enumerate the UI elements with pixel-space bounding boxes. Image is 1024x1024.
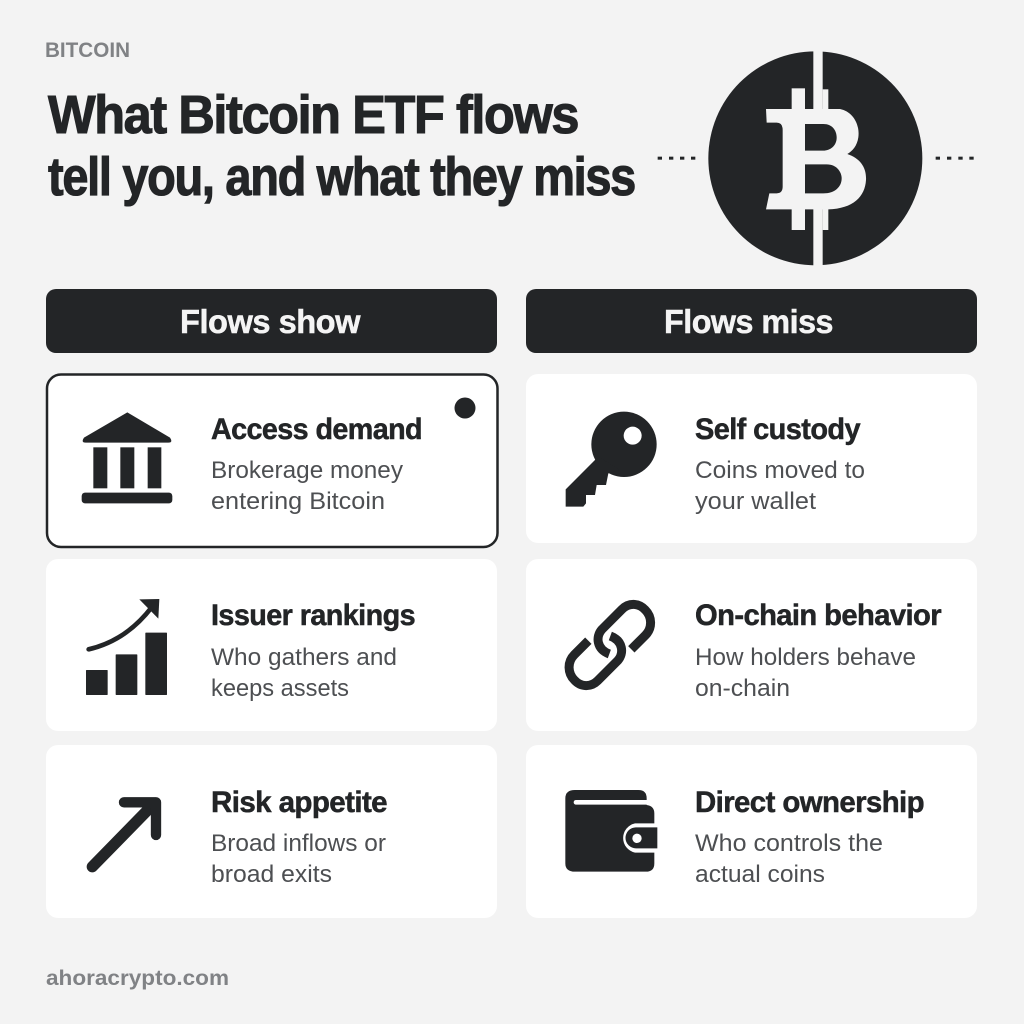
title: What Bitcoin ETF flows <box>48 85 578 145</box>
card: Issuer rankings: keeps assets <box>211 675 349 702</box>
header: Flows show: Flows show <box>180 303 361 340</box>
card: Risk appetite <box>46 745 497 918</box>
eyebrow: BITCOIN: BITCOIN <box>45 39 130 62</box>
footer: site name: ahoracrypto.com <box>46 966 229 990</box>
icon: wallet <box>565 790 658 872</box>
status dot <box>454 398 476 418</box>
card: Issuer rankings: Issuer rankings <box>211 599 415 632</box>
card: Access demand: Access demand <box>211 413 422 446</box>
title <box>48 85 635 207</box>
card: On-chain behavior <box>526 559 977 731</box>
card: Self custody <box>526 374 977 543</box>
card: On-chain behavior: How holders behave <box>695 644 916 671</box>
card: Access demand: entering Bitcoin <box>211 488 385 515</box>
card: Access demand: Brokerage money <box>211 457 404 484</box>
icon: rising bar chart <box>86 599 167 695</box>
card: Direct ownership: Who controls the <box>695 830 883 857</box>
card: Issuer rankings <box>46 559 497 731</box>
card: On-chain behavior: On-chain behavior <box>695 599 942 632</box>
card: Risk appetite: broad exits <box>211 861 332 888</box>
card: Risk appetite: Broad inflows or <box>211 830 386 857</box>
card: Direct ownership: actual coins <box>695 861 825 888</box>
header: Flows show <box>46 289 497 353</box>
card: Self custody: Self custody <box>695 413 861 446</box>
card: Direct ownership: Direct ownership <box>695 786 924 819</box>
card: Risk appetite: Risk appetite <box>211 786 387 819</box>
title: tell you, and what they miss <box>48 147 635 207</box>
card: Self custody: Coins moved to <box>695 457 865 484</box>
header: Flows miss <box>526 289 977 353</box>
icon: up-right arrow <box>92 802 156 867</box>
icon: Bitcoin coin with dotted lines <box>658 43 974 273</box>
card: Self custody: your wallet <box>695 488 816 515</box>
icon: key <box>566 412 657 507</box>
card: Issuer rankings: Who gathers and <box>211 644 397 671</box>
card: Direct ownership <box>526 745 977 918</box>
card: On-chain behavior: on-chain <box>695 675 790 702</box>
icon: chain link <box>569 604 651 686</box>
icon: bank <box>82 412 172 503</box>
card: Access demand <box>47 374 498 547</box>
header: Flows miss: Flows miss <box>664 303 833 340</box>
